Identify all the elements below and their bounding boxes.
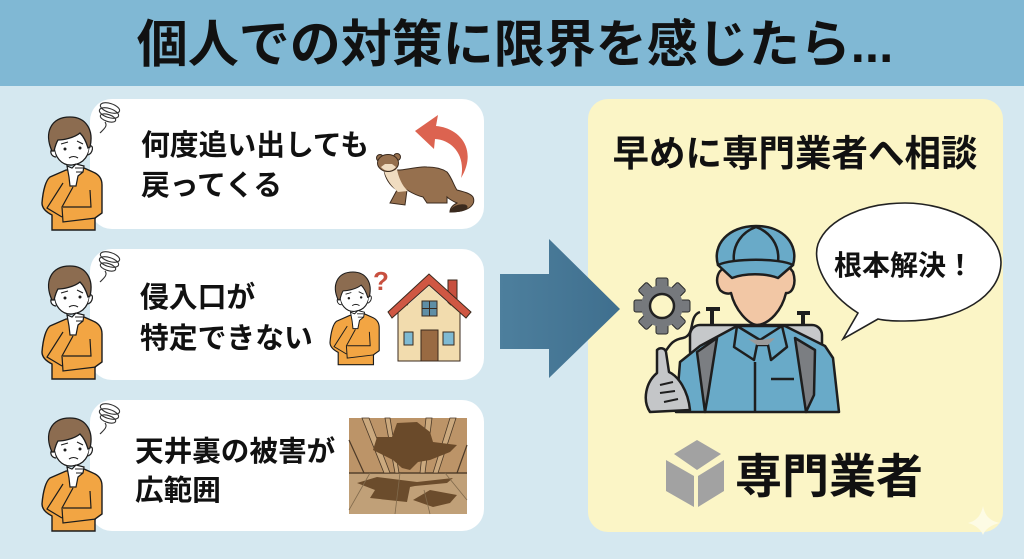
brand name: 専門業者 [735,450,923,503]
heading: 早めに専門業者へ相談 [612,133,978,174]
text: problem 2: 特定できない [140,323,313,355]
image: attic damage [349,418,467,514]
text: problem 2: 侵入口が [140,281,255,314]
panel: problem 3 [42,400,484,531]
icon: cube logo [666,440,724,507]
text: problem 3: 天井裏の被害が [135,435,336,468]
icon: worried person 1 [42,101,121,230]
callout text: 根本解決！ [834,250,974,281]
icon: technician [646,226,839,412]
arrow [500,239,620,378]
icon: gear [634,278,690,334]
panel: problem 2 [42,249,484,380]
speech bubble [817,203,1001,339]
text: problem 1: 戻ってくる [141,170,282,202]
icon: puzzled person [330,272,379,365]
panel: problem 1 [42,99,484,230]
icon: house [388,274,471,361]
icon: return arrow [415,115,468,178]
text: problem 1: 何度追い出しても [141,130,369,162]
title: 個人での対策に限界を感じたら... [137,16,893,73]
icon: weasel [376,154,474,212]
text: problem 3: 広範囲 [135,475,221,507]
icon: worried person 2 [42,250,121,379]
decorative sparkle [968,506,1000,535]
icon: worried person 3 [42,402,121,531]
header band [0,0,1024,86]
icon: question mark: ? [373,266,389,296]
panel: solution [588,99,1003,535]
